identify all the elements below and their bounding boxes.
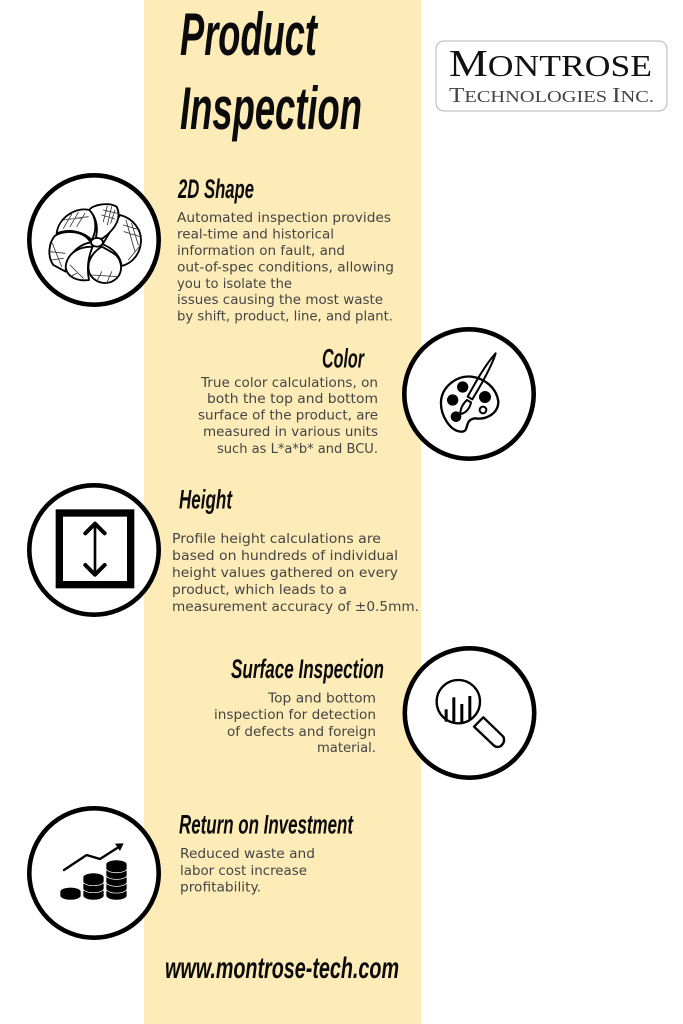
text: 2D Shape description bbox=[177, 211, 394, 324]
text: Color description: such as L*a*b* and BCU. bbox=[217, 442, 378, 457]
text: 2D Shape description: out-of-spec conditions, allowing bbox=[177, 260, 394, 276]
text: 2D Shape description: issues causing the most waste bbox=[177, 293, 383, 308]
icon: magnifying glass over bars in circle bbox=[405, 648, 534, 778]
text: 2D Shape description: by shift, product, line, and plant. bbox=[177, 310, 393, 324]
text: Height description: product, which leads to a bbox=[172, 583, 347, 598]
icon: flower shape in circle bbox=[29, 175, 159, 305]
text: Surface Inspection description: of defects and foreign bbox=[227, 725, 376, 740]
text: Height description: Profile height calculations are bbox=[172, 532, 381, 547]
text: Color description: measured in various units bbox=[203, 425, 378, 440]
icon: height arrow in square bbox=[29, 485, 159, 615]
heading: Return on Investment: Return on Investment bbox=[179, 810, 354, 840]
heading: Surface Inspection: Surface Inspection bbox=[231, 654, 384, 684]
text: Return on Investment description bbox=[180, 847, 315, 896]
text: Height description: based on hundreds of individual bbox=[172, 549, 398, 564]
heading: Color: Color bbox=[322, 344, 365, 374]
icon: coin stacks with rising arrow in circle bbox=[29, 808, 159, 938]
title: Inspection bbox=[180, 75, 362, 142]
icon: paint palette in circle bbox=[404, 329, 534, 459]
yellow centre band bbox=[144, 0, 421, 1024]
text: Height description bbox=[172, 532, 419, 615]
text: Surface Inspection description: inspection for detection bbox=[214, 708, 376, 723]
section: 2D Shape bbox=[29, 174, 394, 324]
section: Height bbox=[29, 484, 419, 615]
title: Product bbox=[180, 1, 319, 68]
website url: www.montrose-tech.com bbox=[165, 952, 399, 985]
text: Color description: True color calculations, on bbox=[200, 376, 378, 391]
text: 2D Shape description: you to isolate the bbox=[177, 277, 292, 292]
text: Return on Investment description: labor cost increase bbox=[180, 864, 307, 879]
section: Return on Investment bbox=[29, 808, 354, 938]
logo: Montrose Technologies Inc. bbox=[436, 41, 667, 111]
text: 2D Shape description: information on fault, and bbox=[177, 244, 345, 259]
text: Height description: measurement accuracy of ±0.5mm. bbox=[172, 600, 419, 615]
title bbox=[180, 1, 362, 142]
logo: Montrose Technologies Inc.: MONTROSE bbox=[449, 43, 652, 85]
section: Color bbox=[198, 329, 534, 459]
text: Height description: height values gathered on every bbox=[172, 566, 398, 581]
text: Color description: surface of the product, are bbox=[198, 408, 378, 424]
text: Return on Investment description: Reduced waste and bbox=[180, 847, 315, 862]
text: Color description bbox=[198, 376, 378, 457]
heading: Height: Height bbox=[179, 484, 233, 514]
text: Return on Investment description: profitability. bbox=[180, 880, 261, 896]
text: 2D Shape description: real-time and historical bbox=[177, 228, 334, 242]
text: Surface Inspection description bbox=[214, 692, 376, 756]
text: Surface Inspection description: Top and bottom bbox=[267, 692, 376, 706]
logo: Montrose Technologies Inc.: TECHNOLOGIES INC. bbox=[449, 83, 654, 107]
section: Surface Inspection bbox=[214, 648, 534, 778]
heading: 2D Shape: 2D Shape bbox=[177, 174, 254, 204]
text: Surface Inspection description: material. bbox=[317, 741, 376, 756]
text: 2D Shape description: Automated inspection provides bbox=[177, 211, 391, 226]
text: Color description: both the top and bottom bbox=[207, 392, 378, 407]
